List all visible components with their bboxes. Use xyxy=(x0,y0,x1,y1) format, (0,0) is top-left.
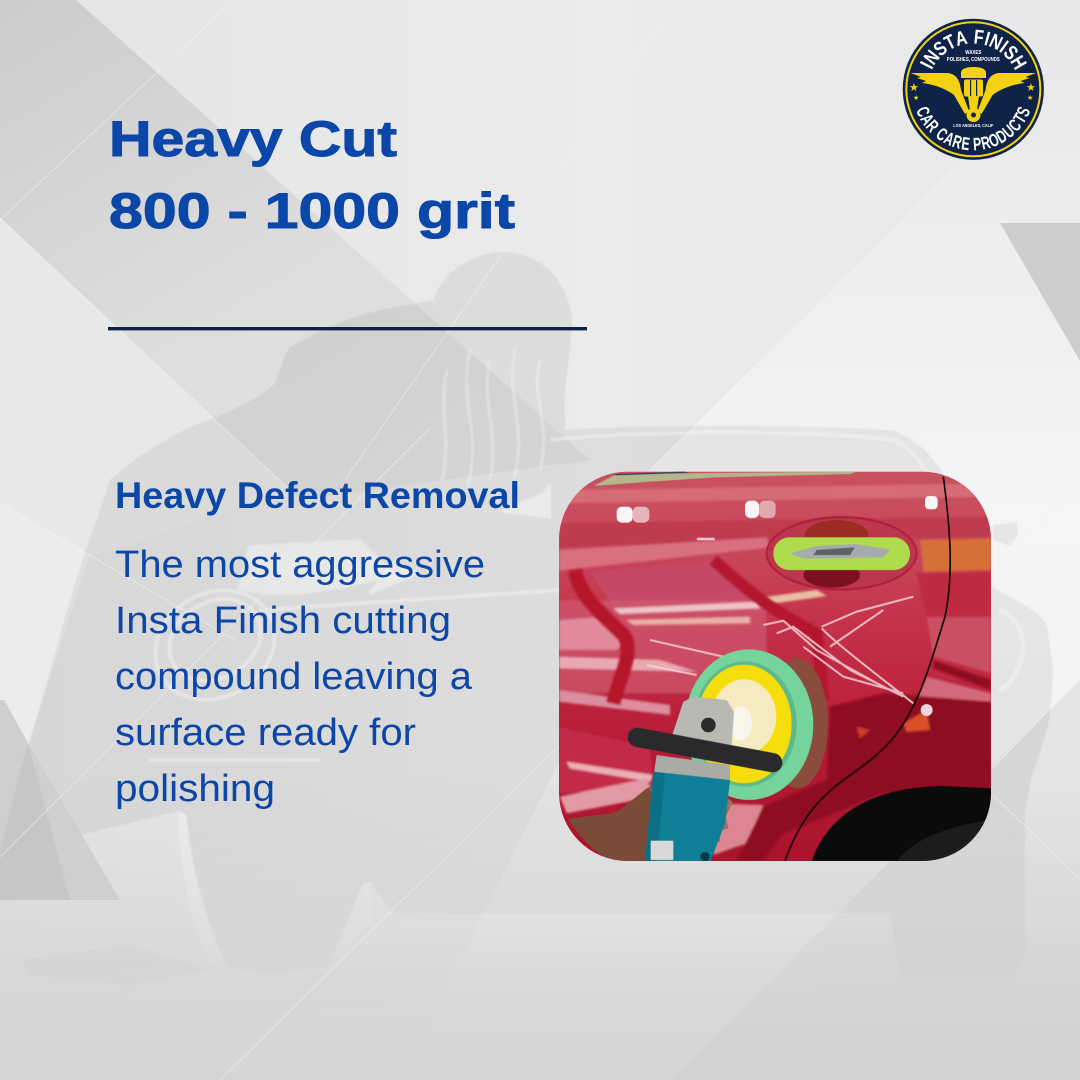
logo wings and piston: ★ xyxy=(913,94,919,102)
logo wings and piston: ★ xyxy=(1026,82,1036,94)
silhouette: woman polishing car xyxy=(0,252,1053,985)
logo arc text: car care products: P xyxy=(972,135,982,155)
logo arc text: car care products: C xyxy=(1005,116,1026,136)
logo arc text: car care products: C xyxy=(912,104,933,120)
body text xyxy=(115,544,485,810)
logo arc text: insta finish: I xyxy=(996,36,1012,57)
logo arc text: car care products: O xyxy=(986,130,1002,152)
logo: Insta Finish Car Care Products badge xyxy=(903,19,1044,160)
dark reflection stripes xyxy=(575,560,823,703)
logo arc text: insta finish xyxy=(916,26,1031,73)
divider line xyxy=(108,327,587,330)
logo arc text: car care products: R xyxy=(922,117,942,137)
logo arc text: car care products: D xyxy=(993,126,1011,148)
body text: compound leaving a xyxy=(115,656,473,698)
logo arc text: insta finish: I xyxy=(982,28,992,50)
door seam xyxy=(785,477,950,861)
body text: surface ready for xyxy=(115,712,416,754)
logo arc text: insta finish: N xyxy=(986,30,1006,54)
logo arc text: car care products: R xyxy=(950,132,964,153)
logo arc text: car care products: S xyxy=(1013,104,1035,120)
body text: The most aggressive xyxy=(115,544,485,586)
logo arc text: car care products: A xyxy=(941,129,957,150)
logo wings and piston: ★ xyxy=(1027,94,1033,102)
car and woman shape xyxy=(0,252,1053,985)
logo arc text: car care products: T xyxy=(1010,110,1031,127)
logo small text: POLISHES, COMPOUNDS xyxy=(947,57,1000,63)
logo arc text: insta finish: F xyxy=(973,26,985,49)
body text: polishing xyxy=(115,768,275,810)
logo arc text: insta finish: A xyxy=(953,26,969,50)
polisher tool xyxy=(637,697,773,861)
logo arc text: car care products: R xyxy=(979,133,992,154)
logo arc text: car care products: U xyxy=(999,122,1019,142)
polishing pad xyxy=(685,649,828,800)
white highlights xyxy=(617,496,938,716)
paint reflections xyxy=(559,483,991,861)
photo: polishing red car door xyxy=(559,472,991,861)
wheel arch xyxy=(812,786,991,861)
logo arc text: car care products xyxy=(912,104,1035,155)
logo arc text: insta finish: I xyxy=(916,58,938,72)
hand xyxy=(568,786,652,861)
logo small text xyxy=(947,50,1000,128)
car details xyxy=(135,432,1023,760)
title xyxy=(109,111,515,239)
logo arc text: insta finish: S xyxy=(929,37,951,61)
chevron paint reflections xyxy=(647,597,913,703)
logo arc text: car care products: A xyxy=(916,111,937,129)
body text: Insta Finish cutting xyxy=(115,600,451,642)
logo arc text: car care products: E xyxy=(960,134,971,155)
logo wings and piston xyxy=(909,67,1036,122)
logo arc text: insta finish: T xyxy=(941,30,959,54)
logo arc text: insta finish: H xyxy=(1006,52,1031,73)
logo wings and piston: ★ xyxy=(909,82,919,94)
logo small text: WAXES xyxy=(965,50,982,56)
title: Heavy Cut xyxy=(109,111,397,167)
door handle xyxy=(766,516,918,591)
logo arc text: car care products: C xyxy=(932,124,951,146)
hair strands xyxy=(442,350,544,485)
logo arc text: insta finish: N xyxy=(919,46,944,69)
logo arc text: insta finish: S xyxy=(999,41,1023,64)
subheading: Heavy Defect Removal xyxy=(115,475,520,516)
masking tape strip xyxy=(593,472,857,486)
title: 800 - 1000 grit xyxy=(109,183,515,239)
logo small text: LOS ANGELES, CALIF xyxy=(953,123,994,128)
